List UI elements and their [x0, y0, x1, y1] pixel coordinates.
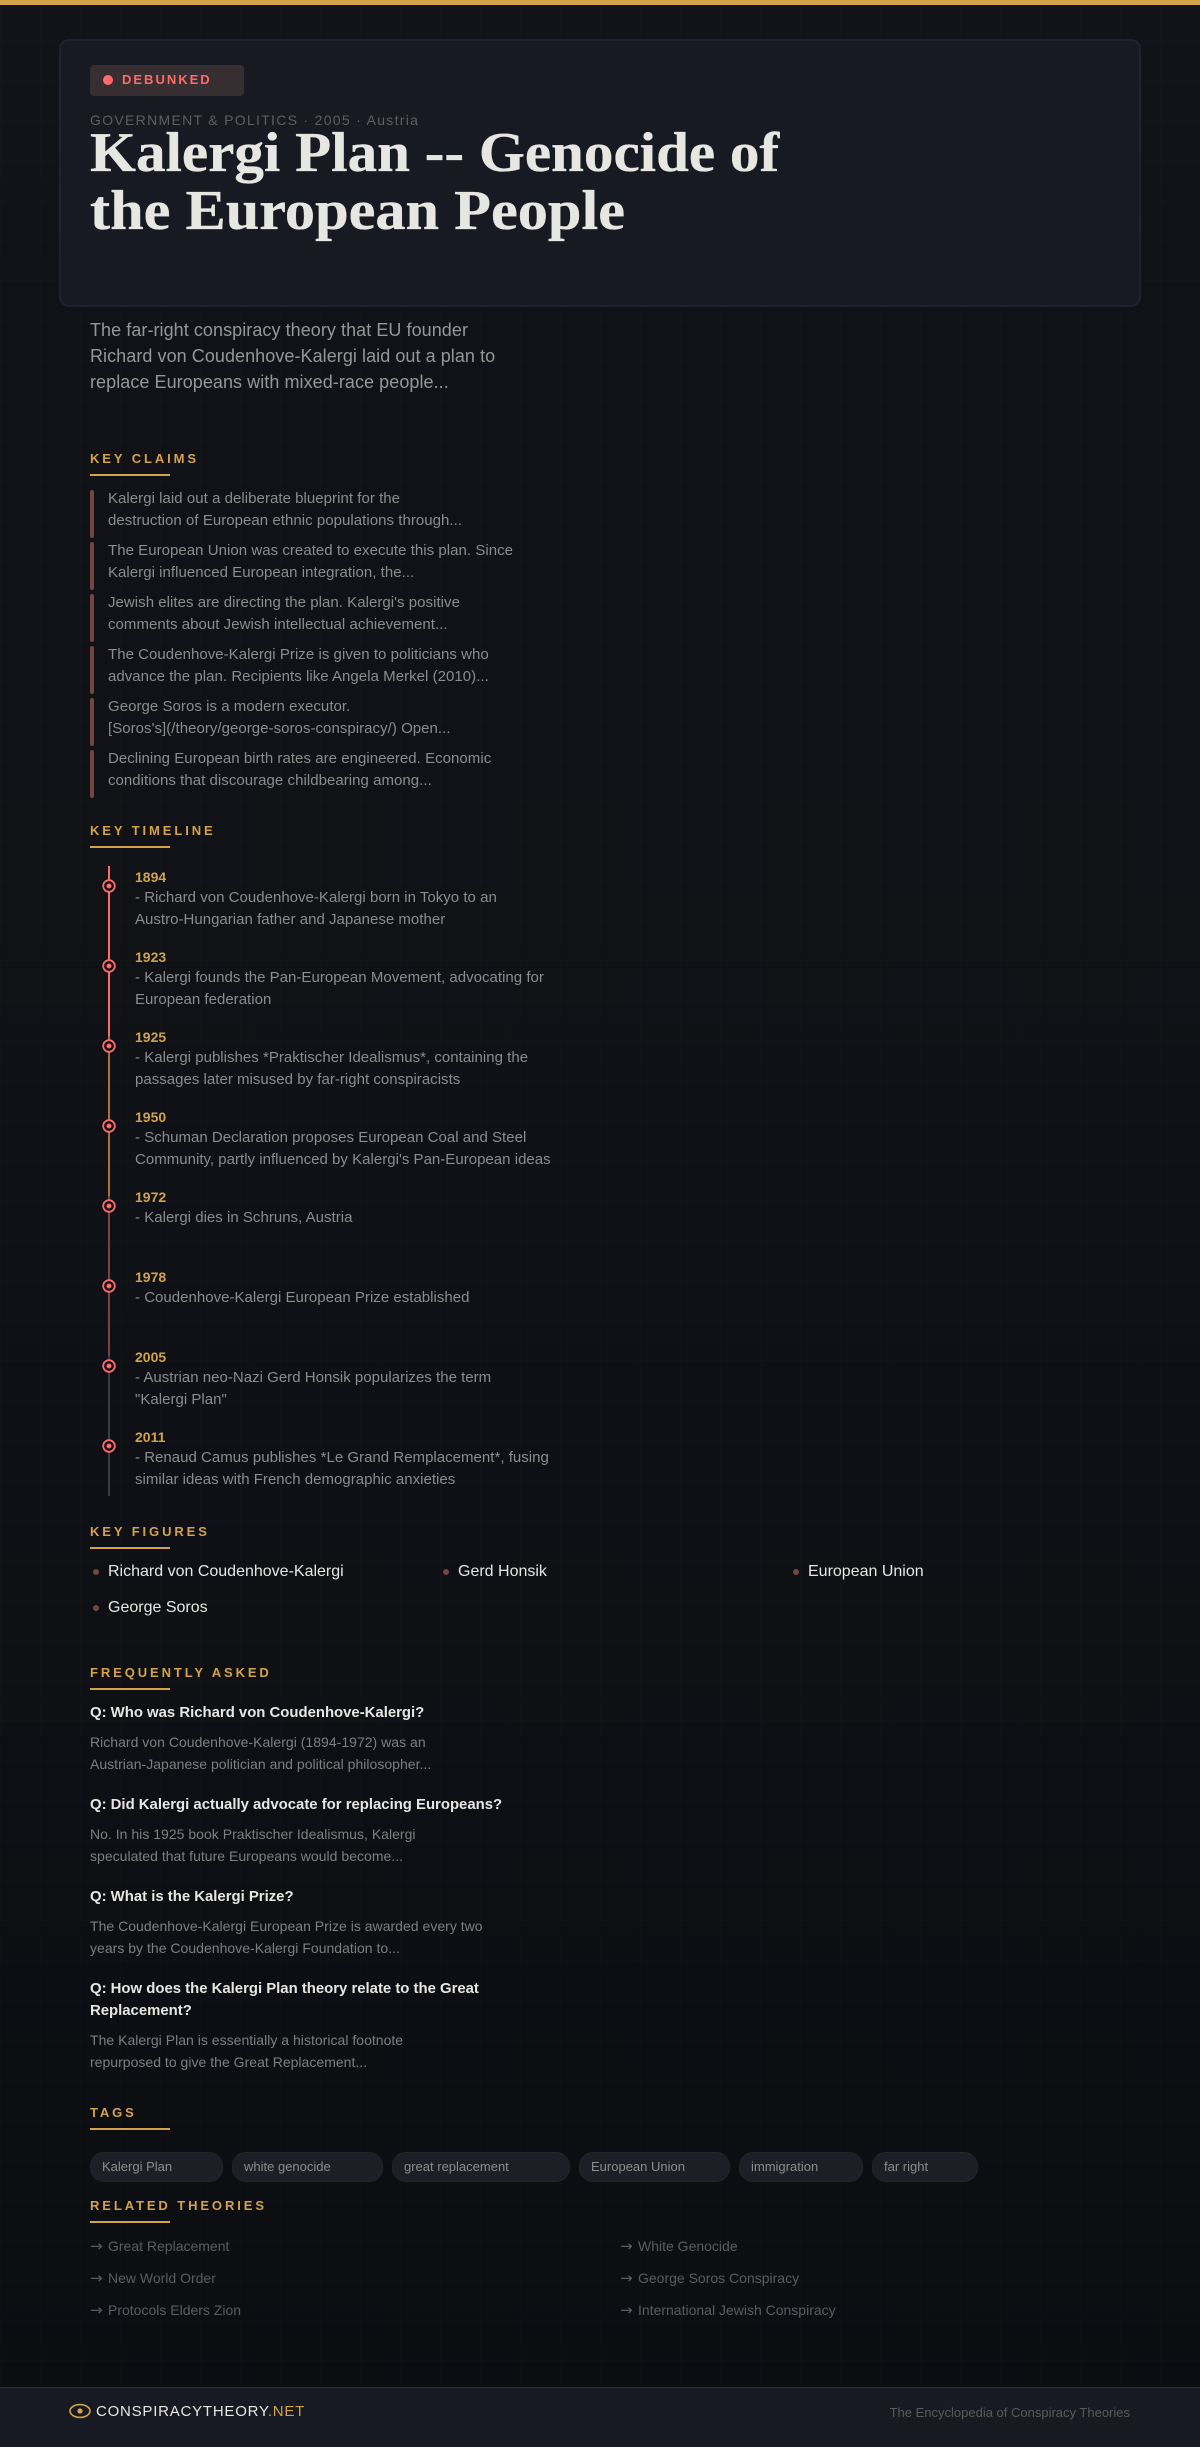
event 2011: 2011	[135, 1429, 165, 1445]
related link: →	[90, 2269, 103, 2287]
related link: White Genocide	[638, 2238, 738, 2254]
tag: immigration	[751, 2159, 818, 2174]
meta line: GOVERNMENT & POLITICS · 2005 · Austria	[90, 112, 419, 128]
event 1950: Community, partly influenced by Kalergi's Pan-European ideas	[135, 1151, 551, 1168]
faq 3: years by the Coudenhove-Kalergi Foundation to...	[90, 1940, 400, 1956]
heading: key claims: KEY CLAIMS	[90, 451, 199, 466]
event 1925: 1925	[135, 1029, 166, 1045]
event 1923: European federation	[135, 991, 271, 1008]
faq 2: speculated that future Europeans would become...	[90, 1848, 403, 1864]
heading: related theories: RELATED THEORIES	[90, 2198, 267, 2213]
related link: International Jewish Conspiracy	[638, 2302, 836, 2318]
faq 2: Q: Did Kalergi actually advocate for replacing Europeans?	[90, 1797, 502, 1813]
related link: Great Replacement	[108, 2238, 229, 2254]
claim 2: The European Union was created to execute this plan. Since	[108, 542, 513, 559]
claim 2: Kalergi influenced European integration, the...	[108, 564, 414, 581]
event 1925	[135, 1029, 528, 1088]
claim 6: conditions that discourage childbearing among...	[108, 772, 432, 789]
footer tagline: The Encyclopedia of Conspiracy Theories	[890, 2405, 1130, 2420]
related link: George Soros Conspiracy	[638, 2270, 799, 2286]
event 1894: - Richard von Coudenhove-Kalergi born in Tokyo to an	[135, 889, 497, 906]
faq 4: The Kalergi Plan is essentially a historical footnote	[90, 2032, 403, 2048]
faq 4	[90, 1981, 479, 2070]
faq 4: Replacement?	[90, 2003, 192, 2019]
tag	[872, 2152, 978, 2182]
figure: George Soros: George Soros	[108, 1599, 208, 1616]
claim 2	[90, 542, 513, 590]
faq 3	[90, 1889, 483, 1956]
claim 1: Kalergi laid out a deliberate blueprint for the	[108, 490, 400, 507]
tag	[739, 2152, 863, 2182]
faq 4: Q: How does the Kalergi Plan theory relate to the Great	[90, 1981, 479, 1997]
heading: frequently asked: FREQUENTLY ASKED	[90, 1665, 272, 1680]
related link: →	[620, 2269, 633, 2287]
icon: eye logo	[69, 2403, 91, 2419]
tag	[579, 2152, 730, 2182]
event 2005: 2005	[135, 1349, 166, 1365]
event 1972: - Kalergi dies in Schruns, Austria	[135, 1209, 352, 1226]
timeline markers	[102, 879, 116, 1453]
related link: →	[620, 2237, 633, 2255]
tag	[232, 2152, 383, 2182]
intro summary: The far-right conspiracy theory that EU founder	[90, 320, 468, 340]
event 1972	[135, 1189, 352, 1226]
event 1978: 1978	[135, 1269, 166, 1285]
claim 6	[90, 750, 491, 798]
icon: status dot	[103, 75, 113, 85]
event 2005	[135, 1349, 491, 1408]
faq 1: Austrian-Japanese politician and political philosopher...	[90, 1756, 431, 1772]
figure: Gerd Honsik: Gerd Honsik	[458, 1563, 547, 1580]
event 1972: 1972	[135, 1189, 166, 1205]
event 2011: similar ideas with French demographic anxieties	[135, 1471, 455, 1488]
heading: key timeline: KEY TIMELINE	[90, 823, 216, 838]
claim 3: Jewish elites are directing the plan. Kalergi's positive	[108, 594, 460, 611]
title: Kalergi Plan -- Genocide of	[90, 122, 779, 184]
tag	[392, 2152, 570, 2182]
faq 3: The Coudenhove-Kalergi European Prize is awarded every two	[90, 1918, 483, 1934]
tag: European Union	[591, 2159, 685, 2174]
faq 2: No. In his 1925 book Praktischer Idealismus, Kalergi	[90, 1826, 416, 1842]
title: the European People	[90, 180, 625, 242]
claim 4: The Coudenhove-Kalergi Prize is given to politicians who	[108, 646, 489, 663]
title	[90, 122, 780, 242]
claim 4: advance the plan. Recipients like Angela Merkel (2010)...	[108, 668, 489, 685]
event 1923: 1923	[135, 949, 166, 965]
event 1923: - Kalergi founds the Pan-European Movement, advocating for	[135, 969, 544, 986]
event 1894: 1894	[135, 869, 166, 885]
related link: →	[620, 2301, 633, 2319]
claim 6: Declining European birth rates are engineered. Economic	[108, 750, 491, 767]
event 1978: - Coudenhove-Kalergi European Prize established	[135, 1289, 469, 1306]
claim 5: [Soros's](/theory/george-soros-conspiracy/) Open...	[108, 720, 451, 737]
badge: debunked	[90, 65, 244, 96]
event 1950: 1950	[135, 1109, 166, 1125]
event 2011: - Renaud Camus publishes *Le Grand Remplacement*, fusing	[135, 1449, 549, 1466]
intro summary: Richard von Coudenhove-Kalergi laid out a plan to	[90, 346, 495, 366]
event 1950: - Schuman Declaration proposes European Coal and Steel	[135, 1129, 526, 1146]
event 1923	[135, 949, 544, 1008]
related link: New World Order	[108, 2270, 216, 2286]
event 1925: passages later misused by far-right conspiracists	[135, 1071, 460, 1088]
tag row	[90, 2152, 978, 2182]
event 1978	[135, 1269, 469, 1306]
faq 3: Q: What is the Kalergi Prize?	[90, 1889, 294, 1905]
faq 4: repurposed to give the Great Replacement...	[90, 2054, 367, 2070]
related link: →	[90, 2237, 103, 2255]
heading: key figures: KEY FIGURES	[90, 1524, 210, 1539]
claim 3: comments about Jewish intellectual achievement...	[108, 616, 448, 633]
timeline	[102, 866, 116, 1496]
panel: hero header	[59, 39, 1141, 307]
event 2011	[135, 1429, 549, 1488]
intro summary: replace Europeans with mixed-race people...	[90, 372, 449, 392]
badge label: DEBUNKED	[122, 72, 212, 87]
faq 1	[90, 1705, 431, 1772]
faq 1: Richard von Coudenhove-Kalergi (1894-1972) was an	[90, 1734, 426, 1750]
tag: great replacement	[404, 2159, 509, 2174]
figure: European Union: European Union	[808, 1563, 924, 1580]
claim 3	[90, 594, 460, 642]
event 2005: "Kalergi Plan"	[135, 1391, 227, 1408]
claim 4	[90, 646, 489, 694]
claim 5: George Soros is a modern executor.	[108, 698, 350, 715]
faq 2	[90, 1797, 502, 1864]
panel: claims list	[90, 490, 513, 798]
related link: Protocols Elders Zion	[108, 2302, 241, 2318]
intro summary	[90, 320, 495, 392]
claim 1: destruction of European ethnic populations through...	[108, 512, 462, 529]
footer	[0, 2387, 1200, 2447]
logo text: CONSPIRACYTHEORY.NET	[96, 2403, 305, 2420]
related link: →	[90, 2301, 103, 2319]
tag: white genocide	[244, 2159, 331, 2174]
tag: Kalergi Plan	[102, 2159, 172, 2174]
tag: far right	[884, 2159, 928, 2174]
event 2005: - Austrian neo-Nazi Gerd Honsik popularizes the term	[135, 1369, 491, 1386]
figure: Richard von Coudenhove-Kalergi: Richard von Coudenhove-Kalergi	[108, 1563, 344, 1580]
event 1925: - Kalergi publishes *Praktischer Idealismus*, containing the	[135, 1049, 528, 1066]
faq 1: Q: Who was Richard von Coudenhove-Kalergi?	[90, 1705, 424, 1721]
tag	[90, 2152, 223, 2182]
event 1894	[135, 869, 497, 928]
top accent bar	[0, 0, 1200, 5]
heading: tags: TAGS	[90, 2105, 137, 2120]
event 1894: Austro-Hungarian father and Japanese mother	[135, 911, 445, 928]
claim 1	[90, 490, 462, 538]
claim 5	[90, 698, 451, 746]
event 1950	[135, 1109, 551, 1168]
timeline axis	[108, 866, 110, 1496]
